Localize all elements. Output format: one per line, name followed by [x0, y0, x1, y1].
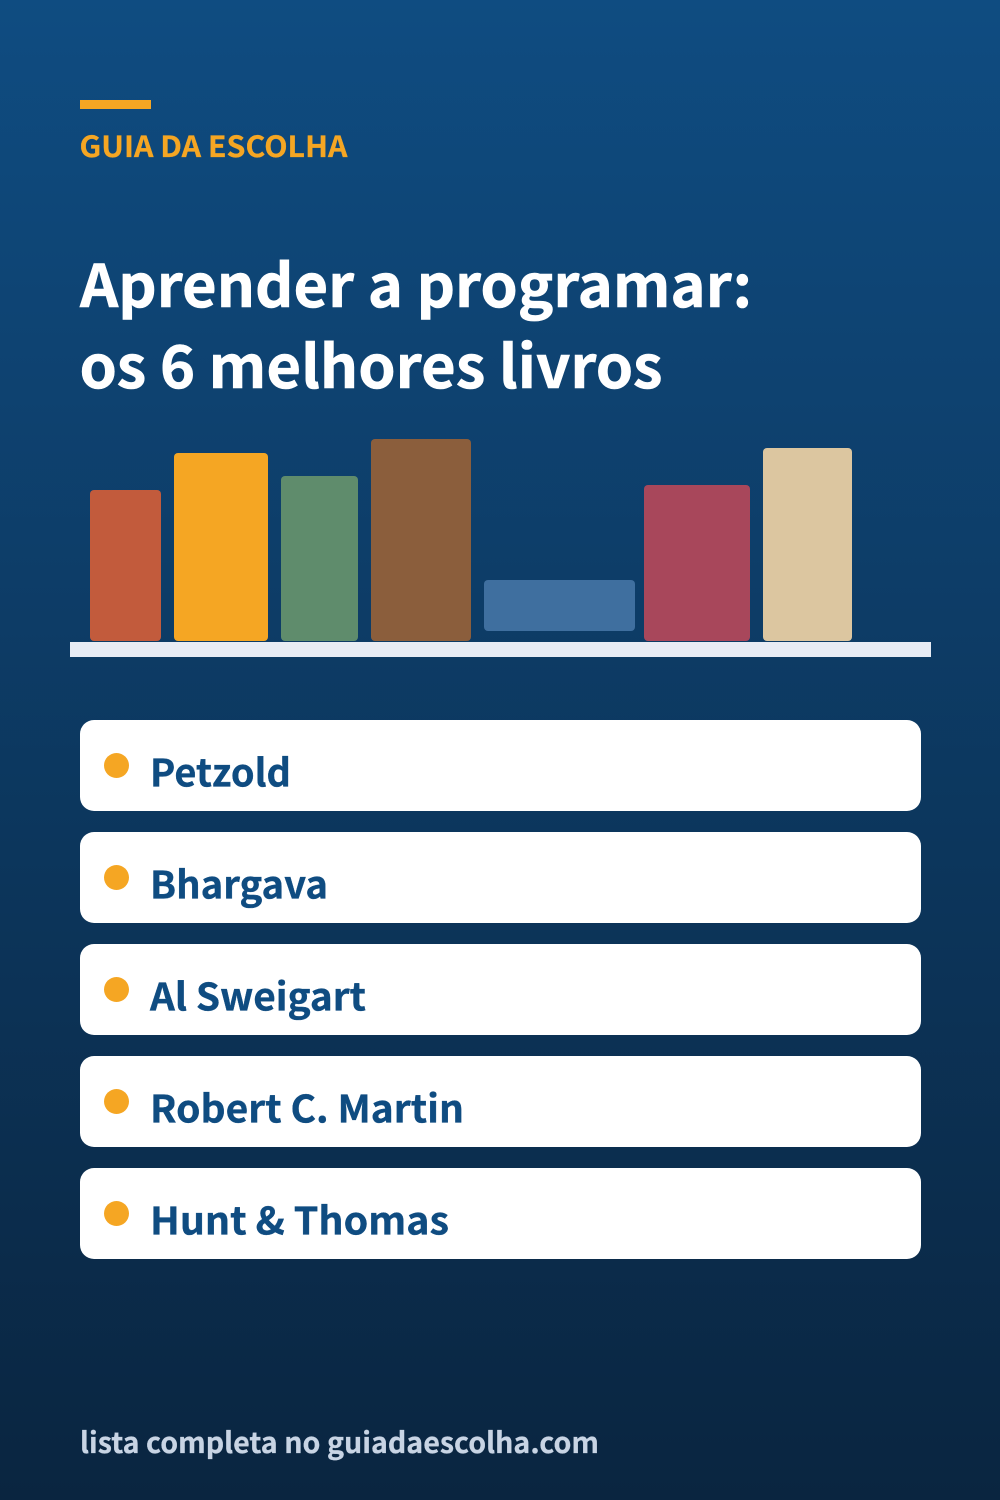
- footer: lista completa no guiadaescolha.com: [80, 1420, 599, 1462]
- shelf: [70, 642, 931, 657]
- bookshelf illustration: [70, 439, 931, 657]
- card: Al Sweigart: Al Sweigart: [149, 966, 366, 1022]
- book: green: [281, 476, 358, 641]
- book: beige: [763, 448, 852, 641]
- book: crimson: [644, 485, 750, 641]
- title: Aprender a programar:: [79, 239, 752, 324]
- accent bar: [80, 100, 151, 109]
- book: brown: [371, 439, 471, 641]
- title: os 6 melhores livros: [80, 320, 662, 405]
- book: yellow: [174, 453, 268, 641]
- book: red: [90, 490, 161, 641]
- card: Bhargava: Bhargava: [150, 854, 328, 910]
- card: Bhargava: [80, 832, 921, 923]
- card: Al Sweigart: [80, 944, 921, 1035]
- card: Petzold: Petzold: [150, 742, 291, 798]
- card: Robert C. Martin: Robert C. Martin: [150, 1078, 464, 1134]
- title: [79, 239, 752, 405]
- card: Robert C. Martin: [80, 1056, 921, 1147]
- book: blue lying flat: [484, 580, 635, 631]
- card: Petzold: [80, 720, 921, 811]
- eyebrow label: GUIA DA ESCOLHA: [80, 124, 348, 166]
- card: Hunt & Thomas: [80, 1168, 921, 1259]
- card: Hunt & Thomas: Hunt & Thomas: [150, 1190, 449, 1246]
